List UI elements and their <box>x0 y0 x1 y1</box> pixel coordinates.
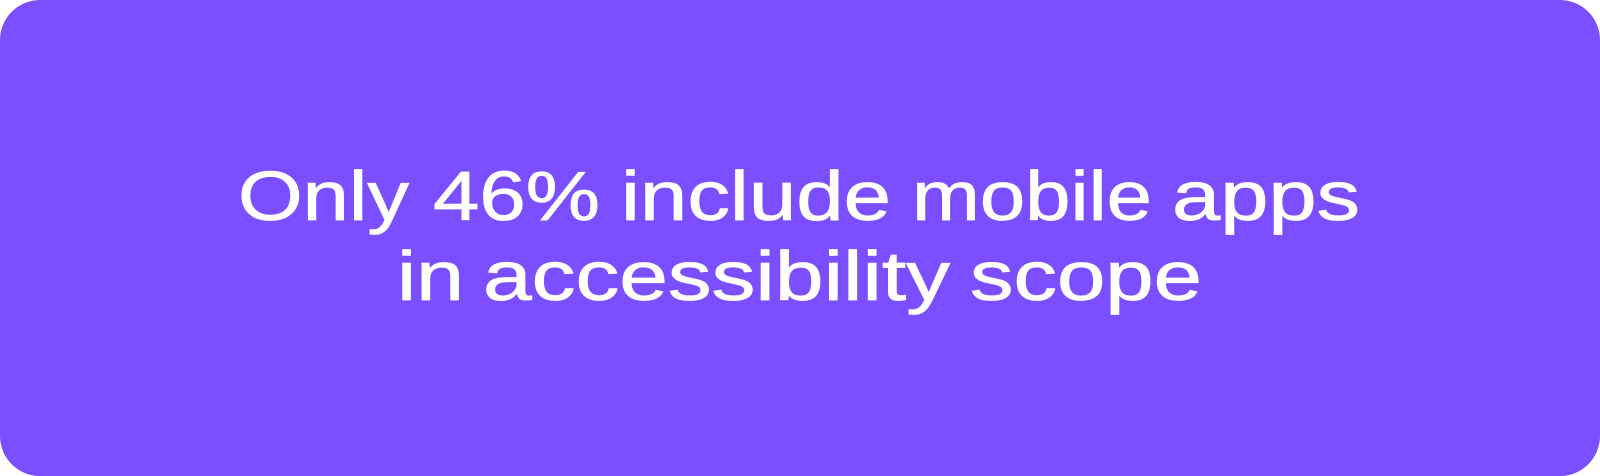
headline text: mobile <box>912 157 1152 235</box>
headline text <box>238 157 1360 315</box>
headline text: 46% <box>433 157 600 235</box>
headline text: apps <box>1172 157 1360 235</box>
headline text: Only <box>238 157 409 235</box>
headline text: accessibility <box>483 237 950 315</box>
headline text: scope <box>970 237 1202 315</box>
headline text: include <box>621 157 891 235</box>
headline text: in <box>397 237 464 315</box>
